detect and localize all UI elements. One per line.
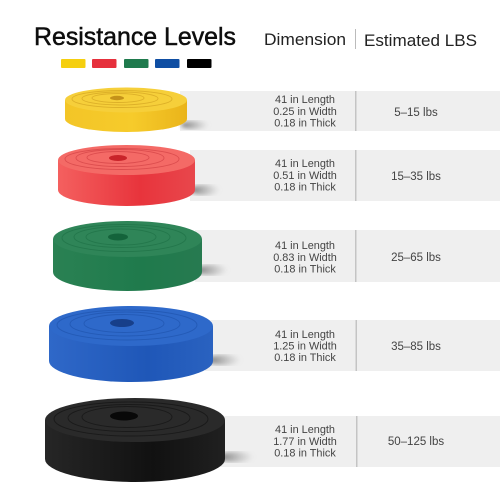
dimension text: 0.18 in Thick bbox=[274, 264, 336, 276]
dimension text: 41 in Length bbox=[275, 94, 335, 106]
weight range: 35–85 lbs bbox=[391, 341, 441, 353]
shadow bbox=[196, 265, 228, 275]
column heading: Estimated LBS: Estimated LBS bbox=[364, 32, 477, 50]
row: green band bbox=[53, 221, 500, 291]
row background bbox=[180, 91, 500, 131]
dimension text: 41 in Length bbox=[275, 158, 335, 170]
dimension text: 1.25 in Width bbox=[273, 340, 337, 352]
colour swatch legend bbox=[61, 59, 212, 68]
dimension text: 41 in Length bbox=[275, 424, 335, 436]
title: Resistance Levels bbox=[34, 23, 236, 51]
icon: blue coil bbox=[49, 306, 213, 382]
row: blue band bbox=[49, 306, 500, 382]
dimension text: 0.18 in Thick bbox=[274, 182, 336, 194]
row: black band bbox=[45, 398, 500, 482]
column heading: Dimension: Dimension bbox=[264, 31, 346, 49]
dimension text: 0.25 in Width bbox=[273, 106, 337, 118]
shadow bbox=[181, 121, 209, 129]
icon: green coil bbox=[53, 221, 202, 291]
weight range: 15–35 lbs bbox=[391, 171, 441, 183]
dimension text: 41 in Length bbox=[275, 329, 335, 341]
weight range: 50–125 lbs bbox=[388, 436, 444, 448]
dimension text: 0.18 in Thick bbox=[274, 118, 336, 130]
shadow bbox=[218, 452, 254, 462]
dimension text: 0.51 in Width bbox=[273, 170, 337, 182]
weight range: 5–15 lbs bbox=[394, 107, 438, 119]
weight range: 25–65 lbs bbox=[391, 252, 441, 264]
row: red band bbox=[58, 145, 500, 206]
dimension text: 0.83 in Width bbox=[273, 252, 337, 264]
dimension text: 41 in Length bbox=[275, 240, 335, 252]
row background bbox=[215, 416, 500, 467]
row: yellow band bbox=[65, 88, 500, 132]
dimension text: 0.18 in Thick bbox=[274, 448, 336, 460]
shadow bbox=[190, 185, 220, 195]
shadow bbox=[207, 355, 241, 365]
row background bbox=[205, 320, 500, 371]
row background bbox=[190, 150, 500, 201]
icon: yellow coil bbox=[65, 88, 187, 132]
dimension text: 0.18 in Thick bbox=[274, 352, 336, 364]
icon: red coil bbox=[58, 145, 195, 206]
row background bbox=[195, 230, 500, 282]
icon: black coil bbox=[45, 398, 225, 482]
dimension text: 1.77 in Width bbox=[273, 436, 337, 448]
